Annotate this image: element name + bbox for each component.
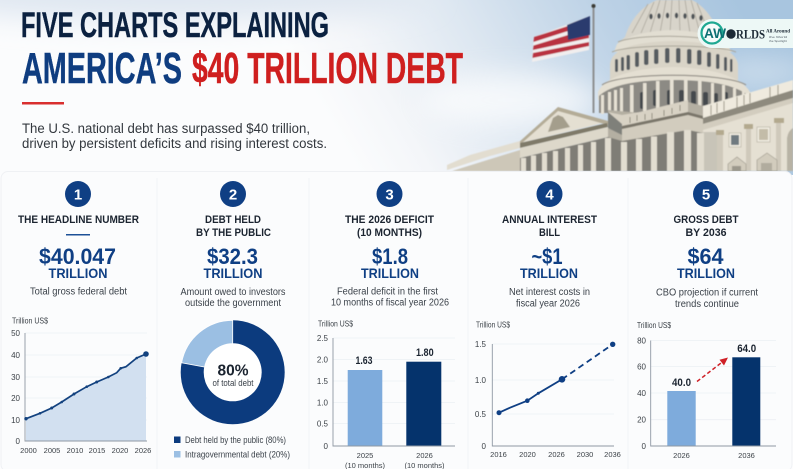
dome — [598, 0, 750, 114]
line chart: total debt: Trillion US$ — [12, 316, 48, 326]
heading 5: BY 2036 — [686, 227, 726, 239]
bar chart: projection: 2026 — [673, 451, 690, 460]
title line 1: FIVE CHARTS EXPLAINING — [21, 6, 329, 45]
donut chart — [181, 320, 285, 424]
description 4: fiscal year 2026 — [516, 298, 580, 310]
value 1: TRILLION — [48, 265, 108, 281]
red trend arrow — [697, 358, 728, 382]
central block and portico — [447, 100, 704, 171]
badge 3: 3 — [385, 186, 394, 204]
heading 3 — [345, 214, 434, 239]
logo badge: the Spotlight — [769, 39, 787, 43]
logo badge: AW — [704, 26, 726, 41]
line chart: total debt: 10 — [11, 416, 21, 425]
bar chart: deficit: 1.63 — [356, 355, 372, 367]
bar chart: deficit — [317, 320, 455, 469]
badge 2 — [220, 181, 246, 207]
value 3: $1.8 — [372, 244, 408, 269]
panel: headline number — [11, 181, 151, 455]
panel: debt held by the public — [174, 181, 290, 460]
right wing — [703, 80, 793, 171]
heading 1: THE HEADLINE NUMBER — [18, 214, 139, 226]
flag and flagpole — [532, 4, 596, 113]
line chart: interest: 2016 — [490, 450, 507, 459]
red accent rule — [22, 102, 64, 104]
donut legend — [174, 435, 290, 460]
badge 2: 2 — [229, 186, 237, 204]
line chart: interest: 1.0 — [475, 376, 487, 385]
badge 3 — [376, 181, 402, 207]
line chart: interest — [475, 320, 621, 459]
intro text: The U.S. national debt has surpassed $40 trillion, — [22, 121, 310, 136]
value 4: TRILLION — [520, 265, 578, 281]
value 3 — [361, 244, 419, 281]
stats card background — [0, 172, 793, 469]
heading 5 — [674, 214, 739, 239]
donut chart: 80% — [218, 362, 248, 380]
badge 5: 5 — [702, 186, 710, 204]
line chart: interest: 2036 — [604, 450, 621, 459]
bar chart: deficit: 2.5 — [317, 334, 329, 343]
line chart: total debt: 30 — [11, 373, 21, 382]
line chart: interest: 0.5 — [475, 410, 487, 419]
bar chart: projection: 80 — [637, 336, 647, 346]
value 5 — [677, 244, 735, 281]
logo badge: RLDS — [736, 26, 765, 42]
line chart: total debt: 20 — [11, 394, 21, 403]
heading 4 — [502, 214, 597, 239]
bar chart: deficit: 2.0 — [317, 356, 329, 364]
value 2 — [204, 244, 262, 281]
bar chart: projection: 40 — [637, 389, 647, 398]
description 5: CBO projection if current — [656, 288, 758, 298]
bar chart: projection: 20 — [637, 416, 647, 425]
capitol building photo — [447, 0, 793, 171]
description 3 — [331, 286, 449, 308]
value 2: $32.3 — [207, 244, 258, 269]
value 3: TRILLION — [361, 265, 419, 281]
bar chart: deficit: 0 — [324, 442, 329, 451]
bar chart: deficit: 1.5 — [317, 377, 329, 386]
donut chart: of total debt — [212, 378, 254, 388]
description 2 — [180, 287, 286, 309]
line chart: interest: 2030 — [577, 450, 593, 459]
bar chart: deficit: 2025 — [357, 451, 373, 460]
logo badge: the World — [769, 35, 787, 39]
badge 1: 1 — [74, 186, 82, 204]
line chart: total debt: 2010 — [67, 446, 83, 455]
bar chart: deficit: 1.0 — [317, 398, 329, 408]
line chart: total debt: 2005 — [44, 446, 60, 455]
heading 3: THE 2026 DEFICIT — [345, 214, 434, 226]
value 1 — [39, 244, 116, 281]
line chart: total debt: 50 — [11, 329, 21, 338]
heading 4: ANNUAL INTEREST — [502, 214, 597, 226]
description 3: Federal deficit in the first — [337, 286, 438, 298]
description 4: Net interest costs in — [509, 287, 590, 298]
heading 2: BY THE PUBLIC — [196, 227, 271, 239]
donut legend: Debt held by the public (80%) — [185, 435, 286, 446]
bar chart: projection: 64.0 — [737, 343, 756, 355]
badge 5 — [693, 181, 719, 207]
sky background — [0, 0, 793, 175]
line chart: total debt: 40 — [11, 351, 21, 360]
title — [21, 6, 463, 93]
description 1: Total gross federal debt — [30, 286, 127, 298]
line chart: interest: 2020 — [519, 450, 536, 459]
line chart: interest: 2026 — [548, 450, 565, 459]
panel: annual interest bill — [475, 181, 621, 459]
value 5: $64 — [688, 244, 724, 269]
value 4: ~$1 — [532, 244, 562, 269]
bar chart: projection — [637, 321, 776, 460]
bar chart: deficit: Trillion US$ — [318, 320, 353, 328]
title line 2 blue: AMERICA’S — [22, 44, 182, 93]
heading 2: DEBT HELD — [205, 214, 261, 226]
description 2: outside the government — [185, 298, 281, 309]
intro text: driven by persistent deficits and rising interest costs. — [22, 136, 327, 151]
line chart: interest: 1.5 — [475, 340, 487, 349]
panel: gross debt by 2036 — [637, 181, 776, 460]
bar chart: deficit: 0.5 — [317, 420, 329, 428]
heading 4: BILL — [539, 227, 560, 239]
bar chart: deficit: 2026 — [416, 451, 433, 460]
badge 1 — [65, 181, 91, 207]
description 5: trends continue — [675, 299, 739, 310]
bar chart: projection: 0 — [642, 442, 647, 451]
line chart: total debt — [11, 316, 151, 455]
value 5: TRILLION — [677, 265, 735, 281]
line chart: total debt: 2020 — [112, 446, 128, 455]
heading 5: GROSS DEBT — [674, 214, 739, 226]
description 2: Amount owed to investors — [180, 287, 286, 298]
line chart: total debt: 0 — [16, 437, 21, 446]
panel: 2026 deficit — [317, 181, 455, 469]
bar chart: projection: 2036 — [738, 451, 755, 460]
line chart: total debt: 2015 — [89, 446, 105, 455]
line chart: total debt: 2000 — [20, 446, 37, 455]
description 3: 10 months of fiscal year 2026 — [331, 298, 449, 308]
bar chart: projection: 60 — [637, 362, 647, 372]
badge 4 — [536, 181, 562, 207]
title line 2 red: $40 TRILLION DEBT — [192, 44, 463, 93]
logo badge — [698, 19, 793, 48]
description 5 — [656, 288, 758, 310]
line chart: interest: 0 — [482, 442, 487, 451]
value 2: TRILLION — [204, 265, 262, 281]
value 4 — [520, 244, 578, 281]
line chart: total debt: 2026 — [135, 446, 151, 455]
bar chart: deficit: 1.80 — [416, 347, 434, 359]
heading 3: (10 MONTHS) — [357, 227, 422, 239]
bar chart: projection: Trillion US$ — [637, 321, 671, 330]
value 1: $40.047 — [39, 244, 116, 269]
donut legend: Intragovernmental debt (20%) — [185, 450, 290, 460]
description 4 — [509, 287, 590, 310]
badge 4: 4 — [545, 186, 554, 204]
logo badge: All Around — [766, 30, 790, 34]
bar chart: projection: 40.0 — [672, 377, 691, 389]
line chart: interest: Trillion US$ — [476, 320, 510, 330]
intro text — [22, 121, 327, 151]
heading 2 — [196, 214, 271, 239]
